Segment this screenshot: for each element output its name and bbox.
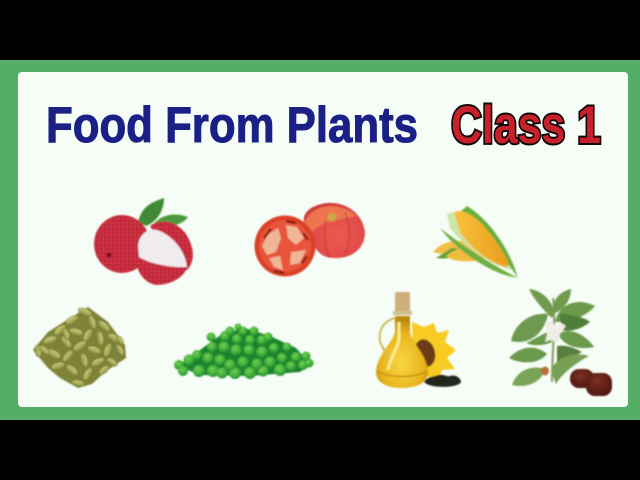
coffee beans (570, 369, 594, 388)
icon: sunflower oil bottle (376, 292, 461, 388)
sunflower centre (412, 337, 438, 369)
seeds (424, 375, 461, 387)
icon: tomatoes (254, 203, 365, 276)
white panel (18, 72, 628, 407)
bottle (376, 316, 428, 388)
icon: lychee (94, 198, 193, 285)
cork (395, 292, 410, 312)
icon: cardamom pile (33, 306, 126, 388)
top black bar (0, 0, 640, 60)
sunflower petals (412, 322, 456, 382)
coffee flowers (545, 320, 566, 342)
class label: Class 1 (451, 96, 601, 155)
bottom black bar (0, 420, 640, 480)
icon: coffee plant (509, 289, 612, 396)
bottle highlight (388, 322, 399, 370)
green frame (0, 60, 640, 420)
icon: corn (433, 206, 518, 278)
title: Food From Plants (46, 96, 418, 153)
icon: green peas (174, 324, 314, 379)
